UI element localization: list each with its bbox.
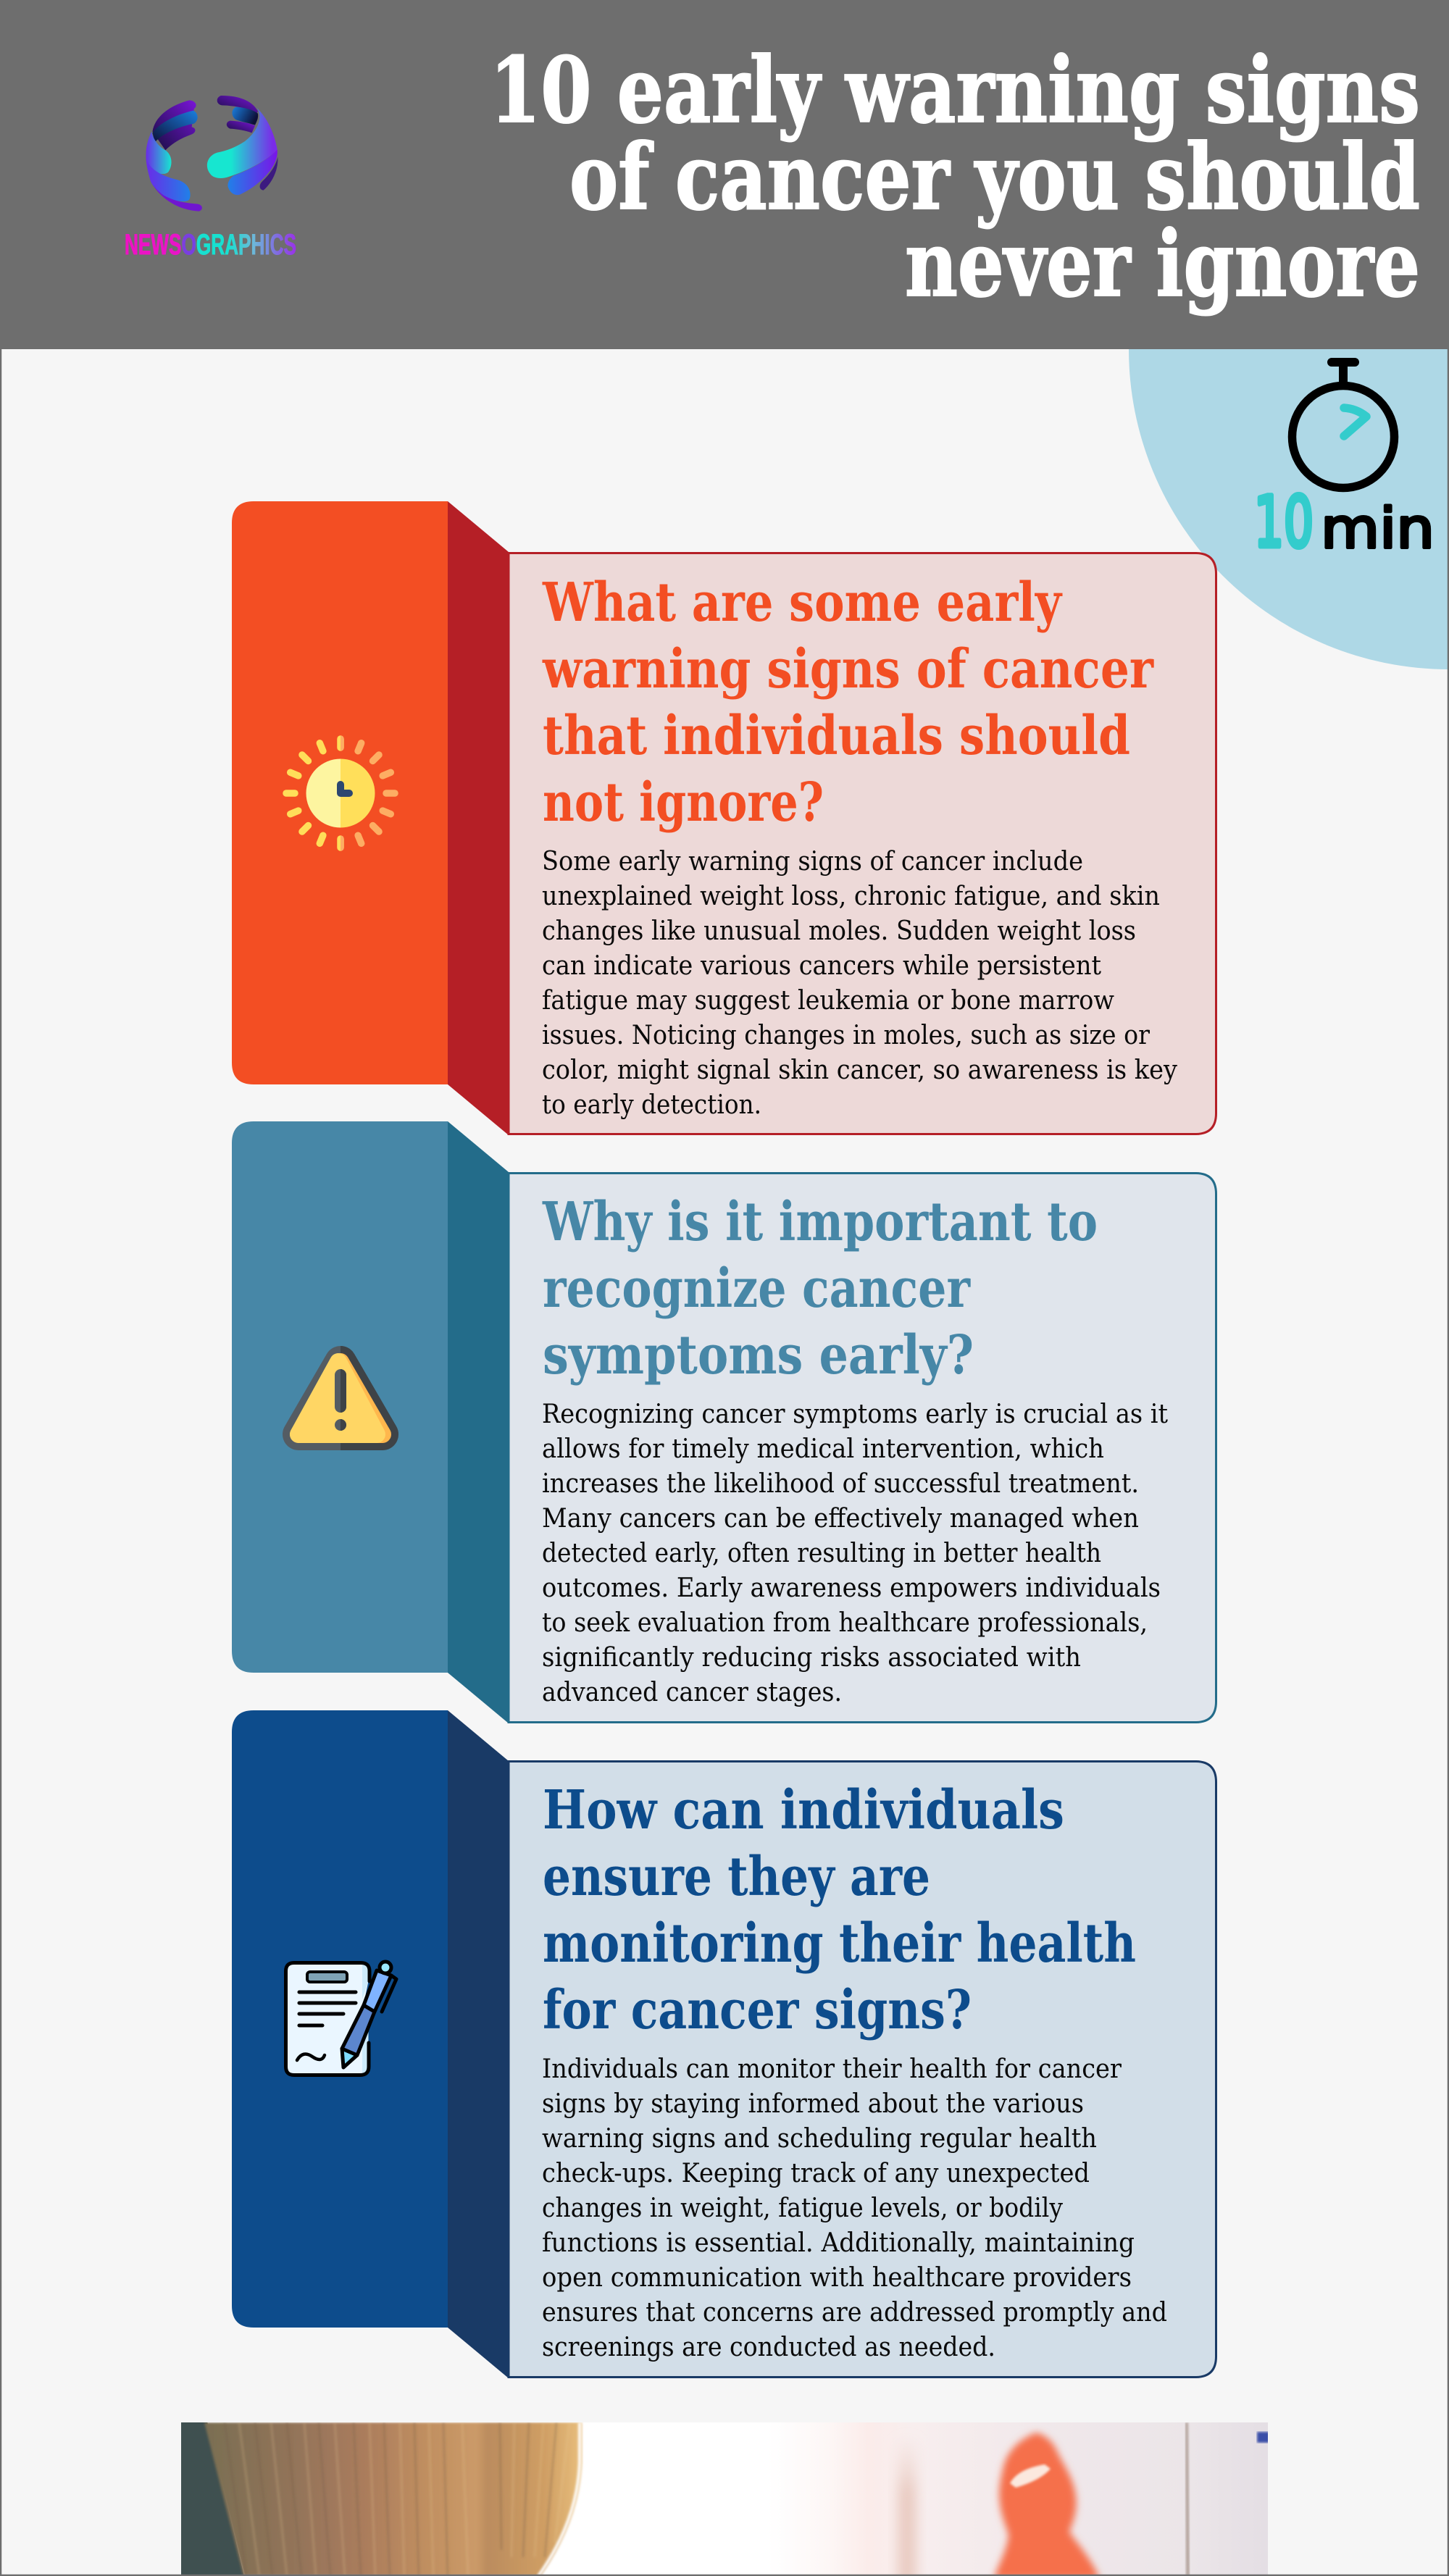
body text: check-ups. Keeping track of any unexpected <box>542 2159 1090 2188</box>
icon: stopwatch with 10 min reading time: 10 <box>1254 482 1314 563</box>
header band <box>0 0 1449 349</box>
body text: Many cancers can be effectively managed when <box>542 1504 1139 1534</box>
text card <box>509 1762 1216 2378</box>
heading: Why is it important to <box>542 1191 1098 1253</box>
logo mark <box>146 96 277 212</box>
body text: issues. Noticing changes in moles, such as size or <box>542 1021 1151 1050</box>
icon: stopwatch with 10 min reading time <box>1254 362 1435 563</box>
body text <box>542 2054 1167 2362</box>
body text: significantly reducing risks associated with <box>542 1643 1081 1673</box>
body text: color, might signal skin cancer, so awareness is key <box>542 1055 1178 1085</box>
dark navy fold <box>448 1710 509 2378</box>
body text: signs by staying informed about the various <box>542 2089 1084 2119</box>
body text <box>542 1400 1168 1707</box>
dark red fold <box>448 501 509 1135</box>
body text: Some early warning signs of cancer include <box>542 847 1083 877</box>
body text: changes in weight, fatigue levels, or bodily <box>542 2194 1064 2223</box>
body text: can indicate various cancers while persistent <box>542 951 1101 981</box>
heading <box>542 1191 1098 1387</box>
text card <box>509 1174 1216 1723</box>
text card <box>509 553 1216 1134</box>
heading: What are some early <box>542 572 1063 634</box>
heading: How can individuals <box>543 1779 1064 1841</box>
body text: to early detection. <box>542 1090 761 1120</box>
dark blue fold <box>448 1121 509 1723</box>
body text: fatigue may suggest leukemia or bone marrow <box>542 986 1114 1016</box>
icon: sun clock <box>286 739 395 848</box>
body text: functions is essential. Additionally, maintaining <box>542 2228 1135 2258</box>
logo wordmark: NEWSOGRAPHICS <box>125 229 296 261</box>
heading: symptoms early? <box>543 1324 974 1387</box>
heading: recognize cancer <box>543 1258 971 1320</box>
heading: ensure they are <box>543 1846 930 1908</box>
body text: warning signs and scheduling regular health <box>542 2124 1097 2154</box>
decorative reading-time circle <box>1129 29 1449 669</box>
photo: woman's hair and doctor with awareness ribbon (cropped) <box>174 2412 1271 2576</box>
body text: unexplained weight loss, chronic fatigue, and skin <box>542 882 1160 911</box>
body text: open communication with healthcare providers <box>542 2263 1132 2293</box>
heading <box>543 1779 1136 2041</box>
heading: that individuals should <box>543 705 1130 767</box>
body text: outcomes. Early awareness empowers individuals <box>542 1573 1161 1603</box>
body text: advanced cancer stages. <box>542 1678 842 1707</box>
body text <box>542 847 1178 1120</box>
navy tab <box>232 1710 448 2328</box>
heading: not ignore? <box>543 771 824 834</box>
panel: what are the warning signs <box>232 501 1216 1135</box>
heading <box>542 572 1154 834</box>
heading: for cancer signs? <box>543 1979 972 2041</box>
body text: Individuals can monitor their health for cancer <box>542 2054 1122 2084</box>
panel: why early recognition matters <box>232 1121 1216 1723</box>
logo: Newsographics <box>125 96 296 261</box>
blue tab <box>232 1121 448 1673</box>
body text: allows for timely medical intervention, which <box>542 1434 1104 1464</box>
body text: ensures that concerns are addressed promptly and <box>542 2298 1167 2328</box>
body text: screenings are conducted as needed. <box>542 2333 995 2362</box>
body text: to seek evaluation from healthcare professionals, <box>542 1608 1148 1638</box>
body text: detected early, often resulting in better health <box>542 1539 1101 1568</box>
orange tab <box>232 501 448 1084</box>
icon: document and pen <box>285 1962 396 2075</box>
icon: warning triangle <box>298 1362 383 1434</box>
body text: increases the likelihood of successful treatment. <box>542 1469 1139 1499</box>
body text: Recognizing cancer symptoms early is crucial as it <box>542 1400 1168 1429</box>
body text: changes like unusual moles. Sudden weight loss <box>542 916 1136 946</box>
heading: warning signs of cancer <box>542 638 1154 701</box>
icon: stopwatch with 10 min reading time: min <box>1321 497 1435 561</box>
heading: monitoring their health <box>543 1912 1136 1975</box>
panel: monitoring your health <box>232 1710 1216 2378</box>
title <box>490 38 1420 317</box>
